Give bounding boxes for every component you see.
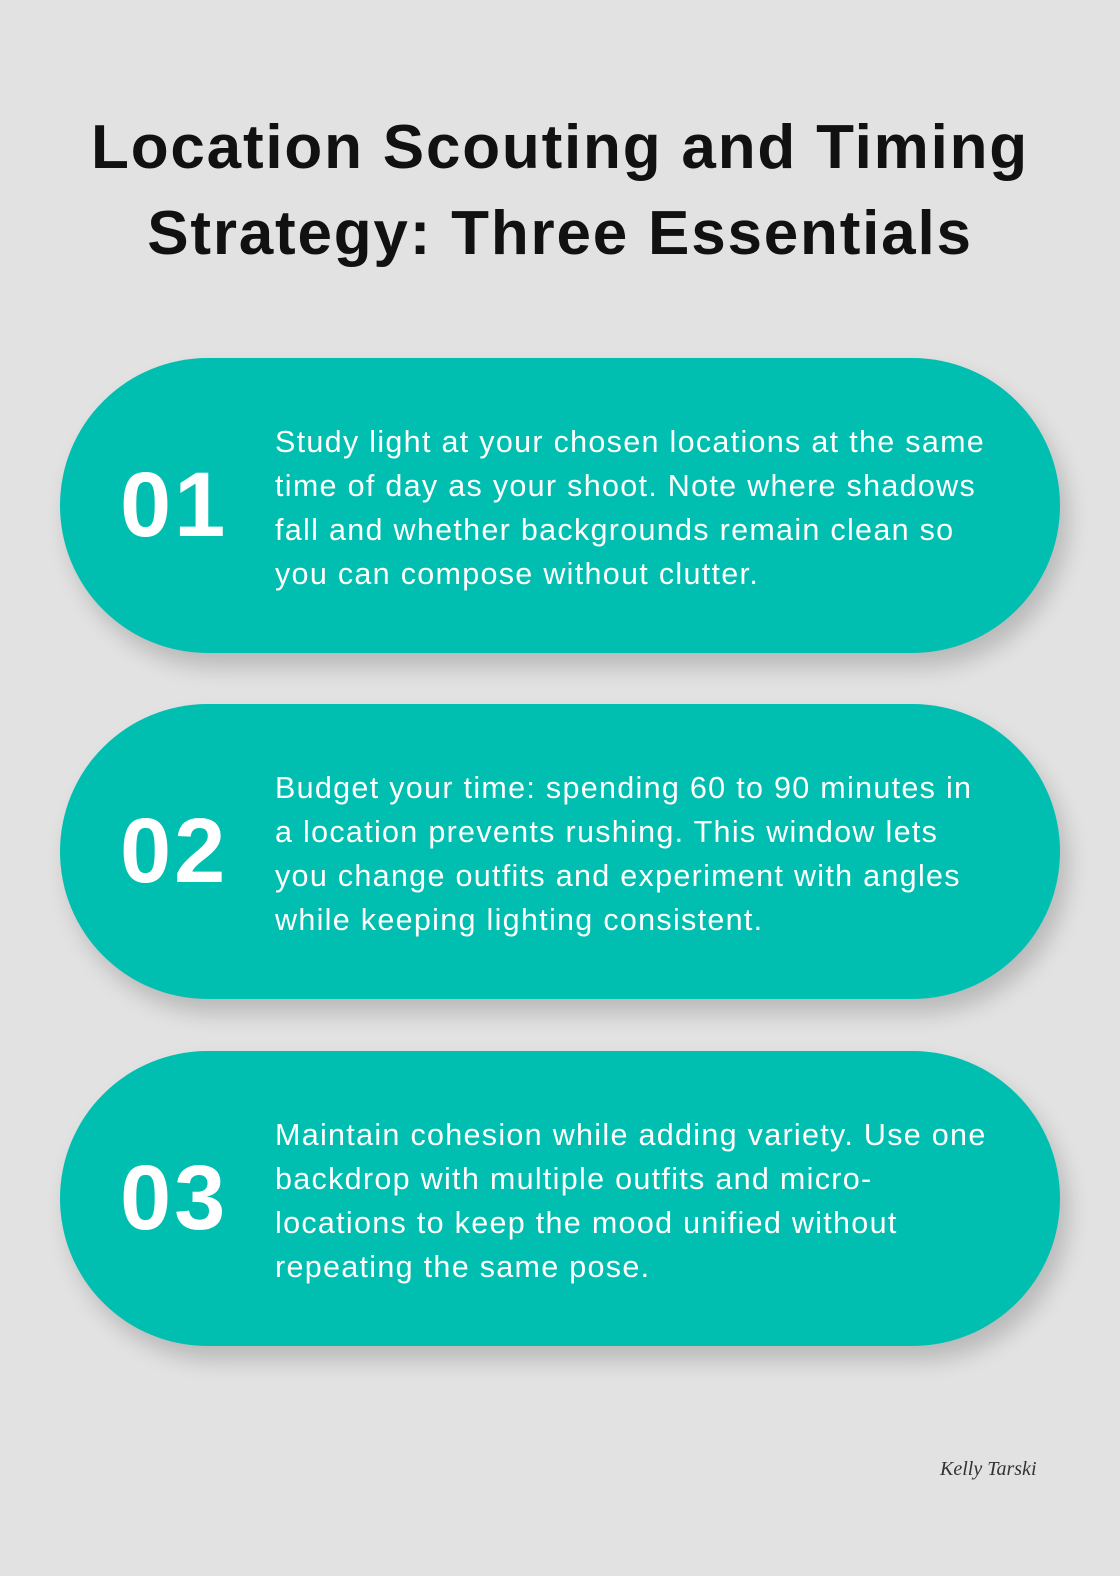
signature logo: Kelly Tarski bbox=[940, 1458, 1036, 1480]
text 02: while keeping lighting consistent. bbox=[275, 903, 763, 937]
text 03 bbox=[275, 1118, 987, 1284]
text 01: time of day as your shoot. Note where shadows bbox=[275, 469, 976, 503]
number 01: 01 bbox=[120, 454, 228, 556]
text 01: Study light at your chosen locations at the same bbox=[275, 425, 985, 459]
title bbox=[91, 113, 1029, 268]
text 03: repeating the same pose. bbox=[275, 1250, 650, 1284]
panel: step 03 bbox=[60, 1051, 1060, 1346]
text 02: a location prevents rushing. This window lets bbox=[275, 815, 938, 849]
text 03: Maintain cohesion while adding variety. Use one bbox=[275, 1118, 987, 1152]
text 03: locations to keep the mood unified without bbox=[275, 1206, 898, 1240]
text 01 bbox=[275, 425, 985, 591]
number 02: 02 bbox=[120, 800, 228, 902]
text 03: backdrop with multiple outfits and micro- bbox=[275, 1162, 872, 1196]
text 02 bbox=[275, 771, 972, 937]
text 02: you change outfits and experiment with angles bbox=[275, 859, 961, 893]
title: Location Scouting and Timing bbox=[91, 113, 1029, 182]
panel: step 02 bbox=[60, 704, 1060, 999]
number 03: 03 bbox=[120, 1147, 228, 1249]
text 01: you can compose without clutter. bbox=[275, 557, 759, 591]
text 02: Budget your time: spending 60 to 90 minutes in bbox=[275, 771, 972, 805]
text 01: fall and whether backgrounds remain clean so bbox=[275, 513, 954, 547]
title: Strategy: Three Essentials bbox=[147, 199, 973, 268]
panel: step 01 bbox=[60, 358, 1060, 653]
